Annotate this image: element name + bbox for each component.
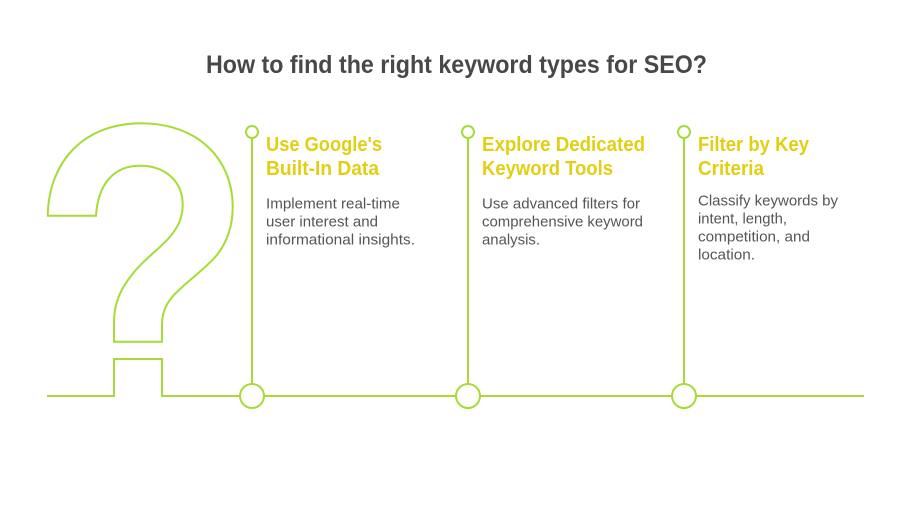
- timeline baseline: [47, 359, 864, 396]
- step 1 body: user interest and: [266, 214, 378, 230]
- step 3 body: location.: [698, 246, 755, 264]
- title: How to find the right keyword types for SEO?: [206, 51, 707, 79]
- step 1: Use Google's Built-In Data: [240, 126, 415, 408]
- step 2 heading: Explore Dedicated: [482, 134, 645, 156]
- step 1 body: informational insights.: [266, 232, 415, 248]
- step 3 heading: Criteria: [698, 158, 765, 180]
- step 1 body: Implement real-time: [266, 196, 400, 212]
- step 3 heading: Filter by Key: [698, 134, 810, 156]
- step 3 body: intent, length,: [698, 210, 787, 228]
- step 3 body: competition, and: [698, 228, 810, 246]
- step 2 body: Use advanced filters for: [482, 196, 640, 212]
- step 1 heading: Built-In Data: [266, 158, 380, 180]
- step 1 heading: Use Google's: [266, 134, 382, 156]
- step 2 body: analysis.: [482, 232, 540, 248]
- step 2: Explore Dedicated Keyword Tools: [456, 126, 645, 408]
- step 3 connector: [672, 126, 696, 408]
- step 2 body: comprehensive keyword: [482, 214, 643, 230]
- step 2 heading: Keyword Tools: [482, 158, 613, 180]
- icon: question mark: [48, 123, 233, 342]
- step 2 connector: [456, 126, 480, 408]
- step 3: Filter by Key Criteria: [672, 126, 838, 408]
- step 1 connector: [240, 126, 264, 408]
- step 3 body: Classify keywords by: [698, 192, 838, 210]
